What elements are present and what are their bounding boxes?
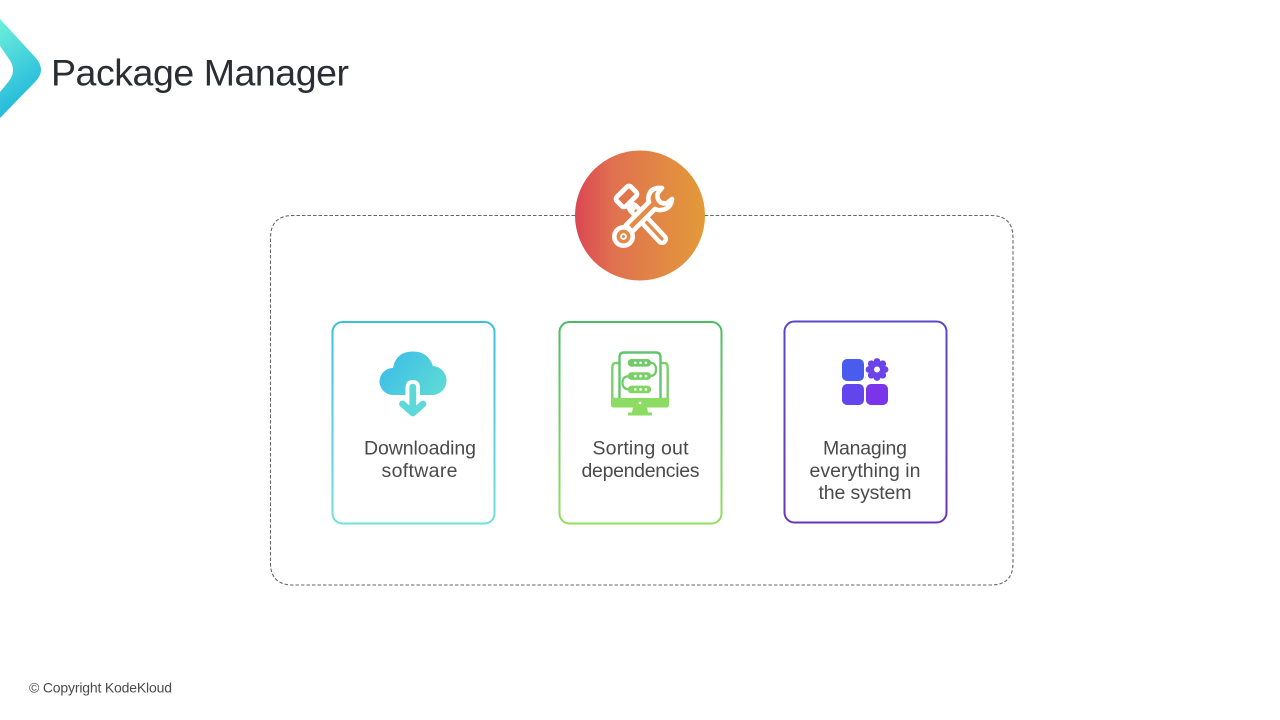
icon: wrench: [614, 188, 672, 246]
card: managing everything: [784, 322, 946, 522]
card: sorting out dependencies: [560, 322, 722, 524]
dashed container: [270, 216, 1013, 585]
label: Sorting out: [592, 438, 689, 460]
label: software: [382, 460, 458, 482]
title: Package Manager: [51, 52, 349, 94]
label: the system: [818, 482, 912, 504]
icon: dependency monitor: [611, 352, 669, 416]
label: Downloading: [364, 438, 476, 460]
icon: cloud download: [380, 352, 447, 413]
label: everything in: [810, 460, 920, 482]
copyright footer: © Copyright KodeKloud: [29, 680, 172, 696]
icon: hammer: [615, 185, 662, 239]
label: dependencies: [582, 460, 700, 482]
card: downloading software: [332, 322, 494, 524]
icon: apps and gear: [842, 358, 888, 405]
label: Managing: [823, 438, 907, 460]
icon: tools badge: [575, 150, 705, 280]
logo chevron: [0, 19, 41, 118]
